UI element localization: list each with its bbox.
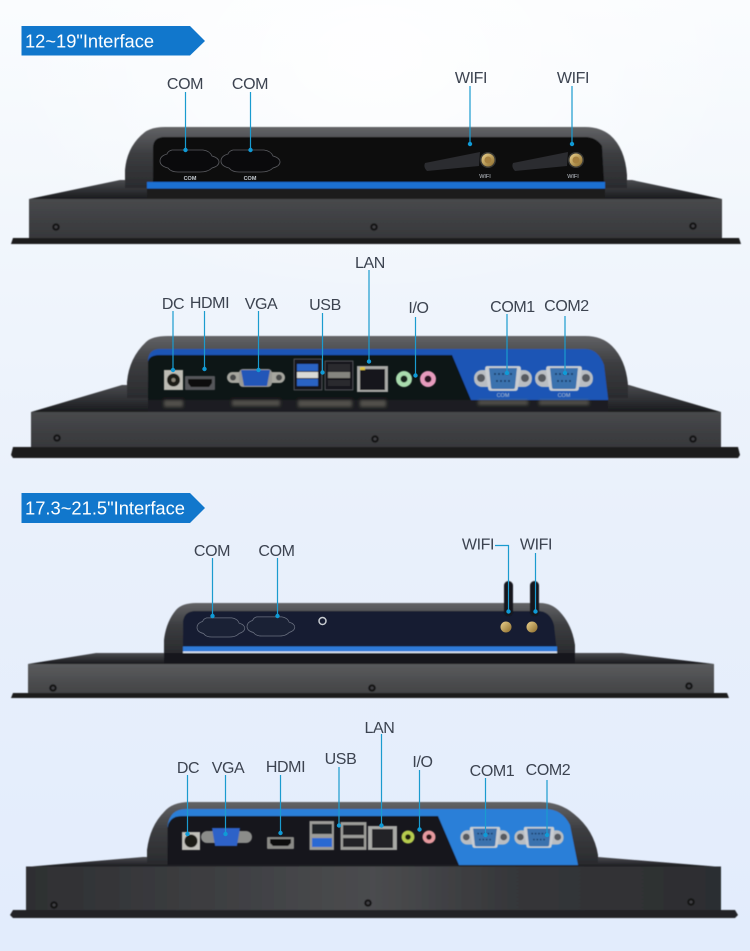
callout labels: HDMI: [190, 295, 229, 312]
callout labels: COM2: [544, 298, 589, 315]
callout labels: COM: [232, 76, 268, 93]
WIFI antennas: WIFI: [479, 174, 491, 180]
ports: [182, 821, 564, 850]
callout labels: HDMI: [266, 759, 305, 776]
panel: 12~19 inch bottom device, IO side: [11, 255, 740, 458]
callout labels: DC: [177, 760, 199, 777]
callout labels: [162, 255, 589, 378]
WIFI antennas: [504, 581, 539, 616]
callout labels: LAN: [365, 720, 394, 737]
COM port covers: COM: [244, 176, 257, 182]
COM port covers: COM: [184, 176, 197, 182]
panel: 17.3~21.5 inch bottom device, IO side: [10, 720, 738, 918]
COM covers, gold connectors and indicator: [197, 617, 538, 637]
callout labels: WIFI: [557, 70, 589, 87]
callout labels: COM: [194, 543, 230, 560]
callout labels: COM2: [526, 762, 571, 779]
callout labels: [177, 720, 571, 837]
ports: [164, 359, 593, 399]
banner: 17.3~21.5 inch interface: 17.3~21.5"Interface: [25, 498, 185, 518]
device bezel and housing: [11, 127, 741, 244]
COM port covers: [160, 150, 280, 182]
device bezel and housing: [11, 336, 740, 458]
WIFI antennas: [424, 152, 584, 180]
callout labels: VGA: [245, 296, 278, 313]
callout labels: [167, 70, 589, 152]
callout labels: DC: [162, 296, 184, 313]
callout labels: I/O: [408, 300, 429, 317]
callout labels: VGA: [212, 760, 245, 777]
callout labels: WIFI: [462, 536, 494, 554]
device bezel and housing: [11, 603, 729, 698]
WIFI antennas: WIFI: [567, 174, 579, 180]
callout labels: WIFI: [520, 536, 552, 554]
callout labels: USB: [325, 751, 356, 768]
callout labels: COM1: [470, 763, 515, 780]
banner: 17.3~21.5 inch interface: [22, 493, 205, 523]
callout labels: USB: [309, 297, 341, 314]
callout labels: [194, 536, 552, 618]
banner: 12~19 inch interface: [22, 26, 205, 56]
banner: 12~19 inch interface: 12~19"Interface: [25, 32, 154, 52]
callout labels: LAN: [355, 255, 385, 272]
ports: COM: [558, 393, 571, 399]
callout labels: COM: [258, 543, 295, 560]
panel: 12~19 inch top device, COM and WIFI side: [11, 70, 741, 244]
ports: COM: [497, 393, 510, 399]
callout labels: COM: [167, 76, 203, 93]
device bezel and housing: [10, 802, 738, 918]
callout labels: COM1: [490, 299, 535, 316]
callout labels: WIFI: [455, 70, 487, 87]
panel: 17.3~21.5 inch top device, COM and WIFI side: [11, 536, 729, 698]
callout labels: I/O: [412, 754, 433, 771]
